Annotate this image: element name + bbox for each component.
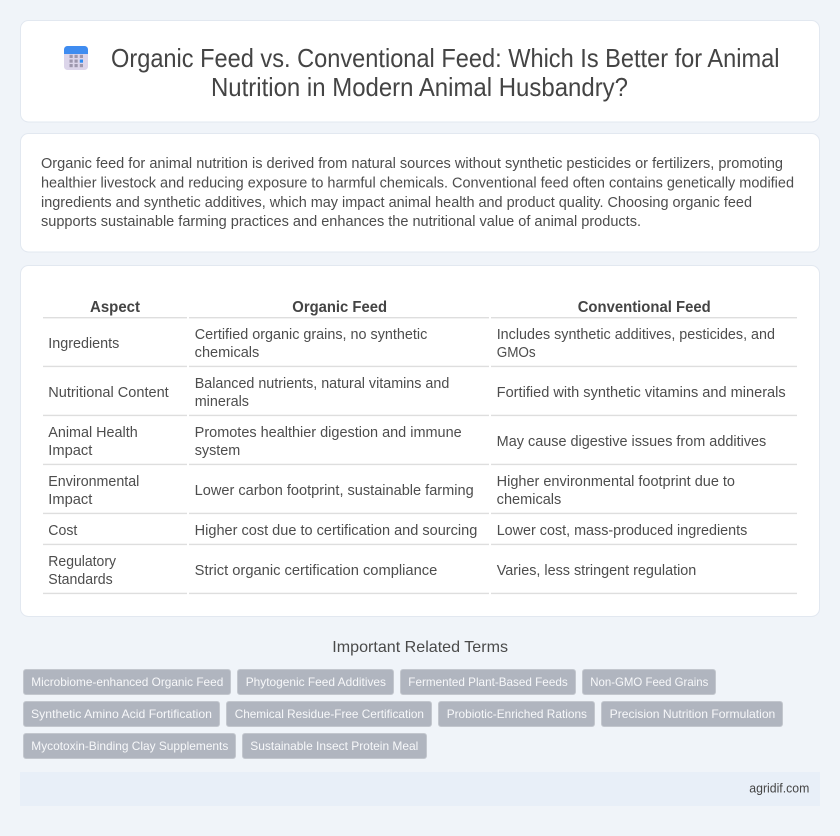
table row: environmental impact: chemicals [497, 492, 561, 508]
tag [242, 734, 426, 758]
tag [438, 702, 594, 726]
panel: introduction [20, 134, 820, 252]
table row: regulatory standards: Varies, less stringent regulation [497, 563, 696, 579]
table header row: Organic Feed [292, 299, 387, 316]
table row: ingredients [48, 327, 775, 361]
table row: regulatory standards [48, 554, 696, 588]
tag: Probiotic-Enriched Rations [447, 707, 587, 721]
tag [238, 670, 394, 694]
table header row: Conventional Feed [578, 299, 711, 316]
table row: animal health impact: Promotes healthier digestion and immune [195, 425, 462, 441]
table row: environmental impact: Impact [48, 492, 92, 508]
tag: Phytogenic Feed Additives [246, 675, 386, 689]
tag [24, 702, 220, 726]
table row: animal health impact: system [195, 443, 240, 459]
table row: nutritional content: Fortified with synthetic vitamins and minerals [497, 385, 786, 401]
tag [226, 702, 432, 726]
table header row [90, 299, 711, 316]
heading: important related terms: Important Related Terms [332, 639, 508, 656]
table row: regulatory standards: Strict organic certification compliance [195, 563, 437, 579]
tag: Microbiome-enhanced Organic Feed [31, 675, 223, 689]
table row: animal health impact: Animal Health [48, 425, 138, 441]
tag [582, 670, 716, 694]
table row: nutritional content: Nutritional Content [48, 385, 169, 401]
table row: nutritional content [48, 376, 786, 410]
table row: ingredients: Ingredients [48, 336, 119, 352]
tag: Precision Nutrition Formulation [610, 707, 775, 721]
title [111, 45, 780, 102]
text block: introduction paragraph [41, 156, 794, 230]
table header row: Aspect [90, 299, 141, 316]
table row: cost: Lower cost, mass-produced ingredients [497, 523, 747, 539]
tag [24, 670, 230, 694]
tag: Fermented Plant-Based Feeds [408, 675, 568, 689]
panel: comparison table [20, 266, 820, 616]
table row: animal health impact: Impact [48, 443, 92, 459]
table row: regulatory standards: Regulatory [48, 554, 117, 570]
tag: Synthetic Amino Acid Fortification [31, 707, 212, 721]
tag [24, 734, 236, 758]
table row: ingredients: chemicals [195, 345, 259, 361]
title: Nutrition in Modern Animal Husbandry? [211, 74, 628, 102]
tag: Non-GMO Feed Grains [590, 675, 708, 689]
table row: animal health impact [48, 425, 766, 459]
tag [602, 702, 782, 726]
table row: ingredients: GMOs [497, 345, 536, 361]
table row: nutritional content: minerals [195, 394, 249, 410]
tag: Chemical Residue-Free Certification [235, 707, 424, 721]
footer: agridif.com [749, 781, 809, 796]
table row: cost: Higher cost due to certification and sourcing [195, 523, 477, 539]
tag: Sustainable Insect Protein Meal [250, 739, 418, 753]
table row: environmental impact: Higher environmental footprint due to [497, 474, 735, 490]
footer [20, 772, 820, 806]
text block: introduction paragraph: supports sustainable farming practices and enhances the nutritional value of animal products. [41, 214, 641, 230]
text block: introduction paragraph: ingredients and synthetic additives, which may impact animal health and product quality. Choosing organic feed [41, 195, 752, 211]
tag: Mycotoxin-Binding Clay Supplements [31, 739, 228, 753]
text block: introduction paragraph: healthier livestock and reducing exposure to harmful chemicals. Conventional feed often contains genetically modified [41, 175, 794, 191]
panel: title card [20, 20, 820, 122]
title: Organic Feed vs. Conventional Feed: Which Is Better for Animal [111, 45, 780, 73]
icon: calendar [64, 46, 88, 70]
table row: environmental impact: Environmental [48, 474, 139, 490]
text block: introduction paragraph: Organic feed for animal nutrition is derived from natural sources without synthetic pesticides or fertilizers, promoting [41, 156, 783, 172]
tag list: related terms [24, 670, 782, 758]
table row: regulatory standards: Standards [48, 572, 113, 588]
table row: environmental impact: Lower carbon footprint, sustainable farming [195, 483, 474, 499]
table row: cost [48, 523, 747, 539]
table row: environmental impact [48, 474, 735, 508]
table row: ingredients: Includes synthetic additives, pesticides, and [497, 327, 775, 343]
table row: ingredients: Certified organic grains, no synthetic [195, 327, 427, 343]
table row: cost: Cost [48, 523, 77, 539]
table row: nutritional content: Balanced nutrients, natural vitamins and [195, 376, 449, 392]
tag [400, 670, 576, 694]
table row: animal health impact: May cause digestive issues from additives [497, 434, 766, 450]
